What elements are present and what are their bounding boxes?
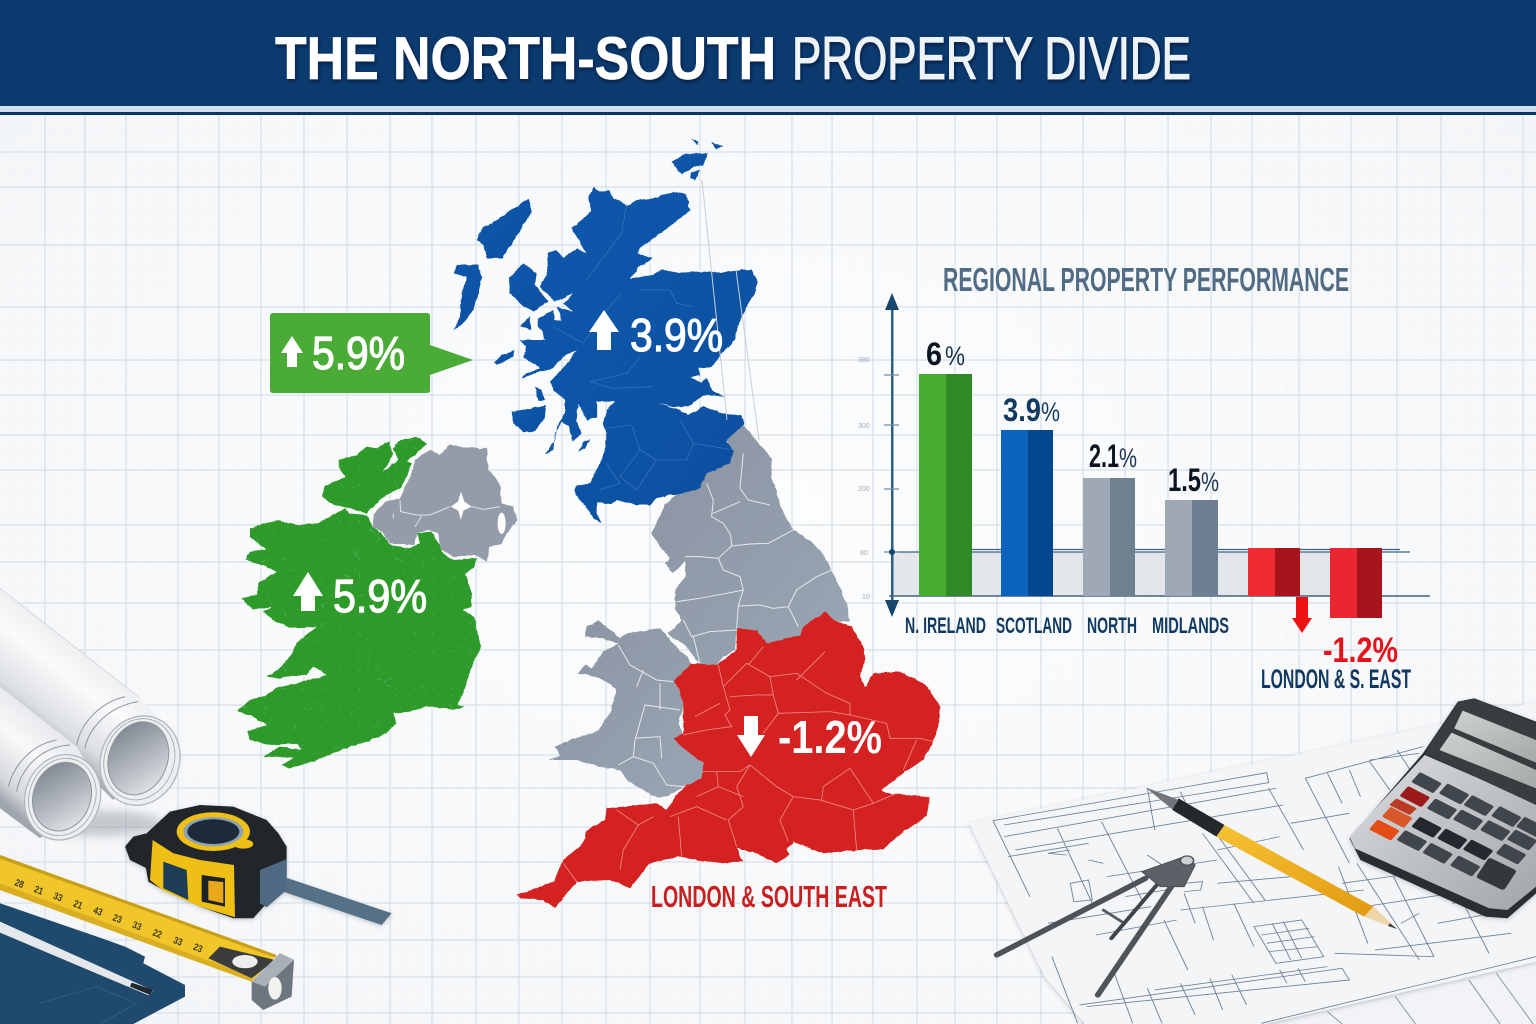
tape measure ruler: 43 xyxy=(92,904,104,918)
label: Scotland 3.9% xyxy=(589,309,723,361)
label: South East -1.2% xyxy=(737,711,882,763)
axis: 10 xyxy=(862,594,870,601)
category labels: NORTH xyxy=(1087,613,1137,638)
bar: Scotland xyxy=(1001,430,1053,596)
tape measure ruler xyxy=(0,855,294,1010)
title: PROPERTY DIVIDE xyxy=(792,25,1191,92)
value labels xyxy=(926,336,1219,498)
tape measure ruler: 33 xyxy=(52,890,64,904)
tape measure ruler: 33 xyxy=(131,919,143,933)
map: faint connector lines xyxy=(702,180,759,440)
map: London and South East xyxy=(517,612,940,908)
tape measure xyxy=(125,805,392,925)
category: London & S. East: LONDON & S. EAST xyxy=(1261,664,1411,694)
blueprint rolls xyxy=(0,588,192,851)
map: Northern Ireland xyxy=(373,444,517,562)
pencil xyxy=(1146,787,1397,929)
shaded baseline band xyxy=(889,550,1410,596)
bar chart xyxy=(858,293,1430,694)
category labels: MIDLANDS xyxy=(1152,613,1229,638)
value labels: % xyxy=(1201,467,1219,497)
tape measure ruler: 23 xyxy=(111,912,124,925)
bar: N. Ireland xyxy=(919,374,972,596)
axis xyxy=(858,293,1430,617)
label: Ireland 5.9%: 5.9% xyxy=(333,570,427,622)
value labels: % xyxy=(1119,443,1137,473)
label: Scotland 3.9%: 3.9% xyxy=(630,309,723,361)
value labels: 3.9 xyxy=(1003,392,1041,428)
tape measure ruler: 28 xyxy=(13,877,26,890)
label: London & South East: LONDON & SOUTH EAST xyxy=(651,879,887,914)
folder xyxy=(0,903,185,1024)
label: Ireland 5.9% xyxy=(293,570,427,622)
value labels: % xyxy=(1041,397,1060,427)
label: South East -1.2%: -1.2% xyxy=(778,711,882,763)
category labels: N. IRELAND xyxy=(905,613,986,638)
title: THE NORTH-SOUTH xyxy=(275,25,776,92)
bar: London 2 xyxy=(1330,548,1382,618)
calculator xyxy=(1349,698,1536,918)
compass xyxy=(997,856,1195,995)
tape measure ruler: 33 xyxy=(172,934,184,948)
tape measure ruler: 23 xyxy=(192,941,204,955)
bar: North xyxy=(1083,478,1135,596)
blueprint sheets xyxy=(969,702,1536,1024)
axis: 200 xyxy=(858,486,870,493)
callout: 5.9%: 5.9% xyxy=(312,327,405,379)
map: Ireland republic xyxy=(237,437,482,768)
map: northern England and Wales xyxy=(548,425,850,798)
tape measure ruler: 21 xyxy=(33,883,45,897)
axis: 80 xyxy=(860,550,868,557)
value labels: 1.5 xyxy=(1168,462,1201,498)
bar: London 1 xyxy=(1248,548,1300,596)
title xyxy=(275,25,1191,92)
icon: up arrow xyxy=(281,336,303,367)
value labels: 2.1 xyxy=(1089,438,1119,474)
header banner xyxy=(0,0,1536,115)
bar: Midlands xyxy=(1165,500,1218,596)
axis: 300 xyxy=(858,423,870,430)
callout: 5.9% xyxy=(270,313,473,393)
category labels: SCOTLAND xyxy=(996,613,1072,638)
value labels: 6 xyxy=(926,336,942,372)
map: Scotland xyxy=(453,138,758,523)
axis: 380 xyxy=(858,357,870,364)
value labels: % xyxy=(945,341,965,371)
calculator keys xyxy=(1369,772,1536,891)
tape measure ruler: 22 xyxy=(151,927,164,940)
floor plan drawing xyxy=(993,747,1536,1023)
icon: red down arrow xyxy=(1292,597,1312,633)
category labels xyxy=(905,613,1229,638)
tape measure ruler: 21 xyxy=(72,898,84,911)
value: -1.2%: -1.2% xyxy=(1323,631,1398,670)
